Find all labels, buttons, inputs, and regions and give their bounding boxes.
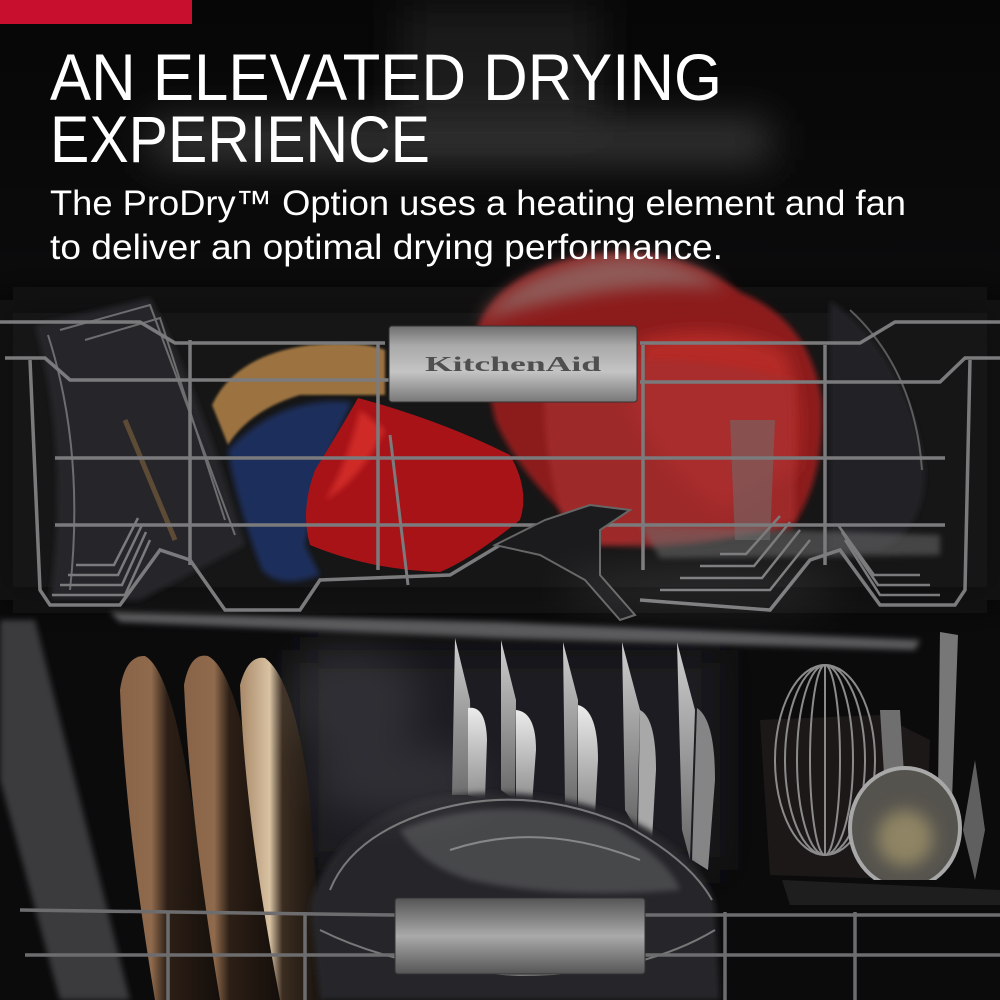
lower rack: utensils basket	[760, 632, 1000, 1000]
red accent bar	[0, 0, 192, 24]
glass dish stack left	[35, 298, 245, 600]
rack latch mechanism	[495, 505, 635, 620]
blue plate	[228, 401, 352, 581]
subtitle: to deliver an optimal drying performance.	[50, 228, 723, 267]
steam	[280, 565, 840, 815]
tan plate	[212, 343, 385, 445]
strainer	[850, 768, 960, 888]
clear plate right	[830, 300, 925, 550]
lower rack: white plates	[452, 638, 715, 870]
lower rack handle	[395, 898, 645, 974]
glass base	[640, 525, 940, 558]
upper rack wires	[0, 322, 1000, 610]
upper rack handle with KitchenAid logo: KitchenAid	[425, 352, 602, 376]
subtitle	[50, 184, 906, 267]
subtitle: The ProDry™ Option uses a heating element and fan	[50, 184, 906, 223]
lower rack: glass bowl	[310, 793, 720, 1000]
basket	[782, 880, 1000, 1000]
measuring glass	[544, 360, 795, 547]
lower rack: cutting boards	[0, 620, 325, 1000]
title	[50, 40, 722, 176]
red bowl in background	[476, 253, 822, 545]
upper rack handle with KitchenAid logo	[389, 326, 637, 402]
rack shelf rail	[110, 612, 920, 650]
upper rack dishes	[35, 253, 940, 600]
red ramekin	[306, 398, 523, 572]
lower rack wires	[20, 910, 1000, 1000]
title: EXPERIENCE	[50, 102, 430, 176]
title: AN ELEVATED DRYING	[50, 40, 722, 114]
